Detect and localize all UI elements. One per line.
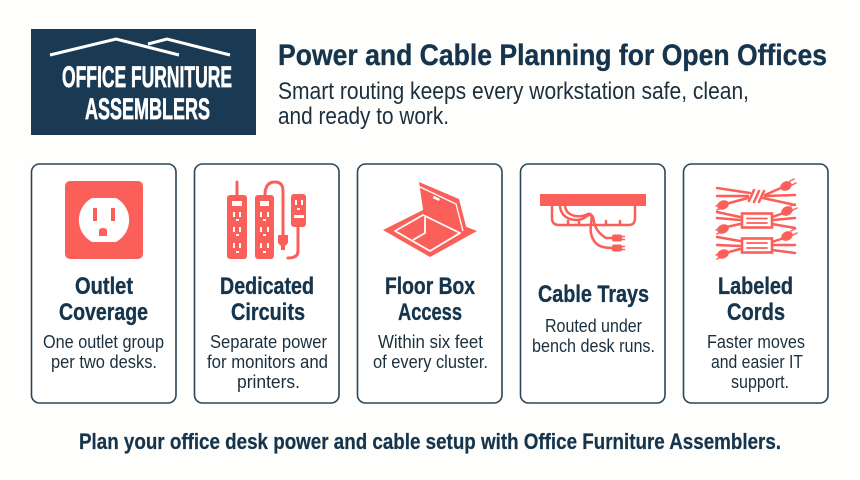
heading: Outlet — [75, 273, 133, 300]
heading: Floor Box — [385, 273, 476, 300]
heading: Labeled — [718, 273, 793, 300]
icon: floor box — [383, 182, 477, 257]
heading: Dedicated — [220, 273, 314, 300]
subtitle: Smart routing keeps every workstation safe, clean, — [278, 78, 749, 105]
heading: Access — [398, 299, 462, 326]
heading — [59, 273, 148, 326]
panel: labeled cords — [684, 164, 828, 403]
heading — [220, 273, 314, 326]
logo: Office Furniture Assemblers: ASSEMBLERS — [85, 93, 210, 126]
description: Faster moves — [707, 331, 805, 352]
description — [532, 315, 655, 356]
logo: Office Furniture Assemblers: OFFICE FURNITURE — [62, 61, 232, 94]
icon: cable tray — [540, 194, 646, 252]
description: Separate power — [210, 331, 327, 352]
logo: Office Furniture Assemblers — [31, 29, 256, 135]
subtitle — [278, 78, 749, 130]
description — [207, 331, 328, 392]
description: bench desk runs. — [532, 335, 655, 356]
description: and easier IT — [711, 351, 803, 372]
description: One outlet group — [43, 331, 164, 352]
description: support. — [731, 371, 789, 392]
description: Routed under — [545, 315, 642, 336]
description: per two desks. — [51, 351, 157, 372]
description: Within six feet — [378, 331, 483, 352]
panel: outlet coverage — [32, 164, 176, 403]
heading: Circuits — [231, 299, 305, 326]
heading — [718, 273, 793, 326]
description — [707, 331, 805, 392]
subtitle: and ready to work. — [278, 103, 449, 130]
panel: dedicated circuits — [194, 164, 339, 403]
icon: labeled cords — [716, 179, 797, 260]
panel: cable trays — [520, 164, 665, 403]
heading — [385, 273, 476, 326]
description — [373, 331, 488, 372]
description: of every cluster. — [373, 351, 488, 372]
description — [43, 331, 164, 372]
heading: Cable Trays — [538, 281, 649, 308]
icon: power strips — [227, 182, 306, 259]
icon: wall outlet — [65, 181, 143, 259]
description: for monitors and — [207, 351, 328, 372]
heading: Coverage — [59, 299, 148, 326]
panel: floor box access — [358, 164, 502, 403]
description: printers. — [237, 371, 300, 392]
heading: Cords — [727, 299, 785, 326]
